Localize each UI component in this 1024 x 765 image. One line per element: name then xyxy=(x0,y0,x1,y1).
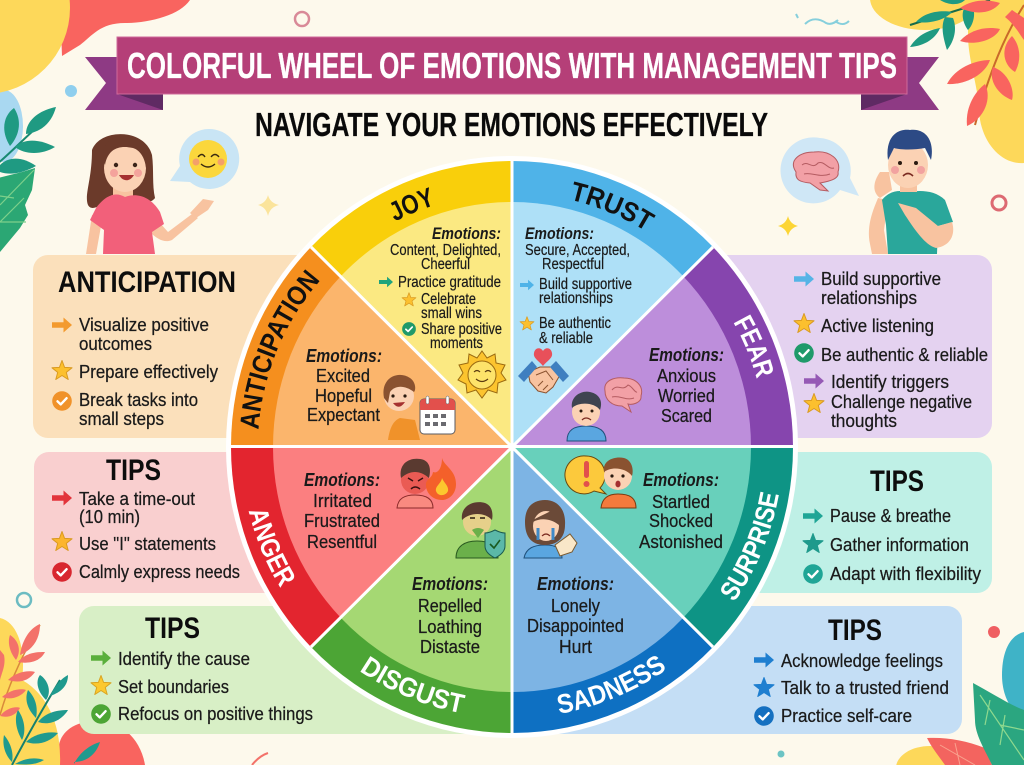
sector: surprise: Astonished xyxy=(639,531,723,552)
panel background xyxy=(34,452,334,593)
heading: TIPS xyxy=(828,614,882,647)
sector: trust: Build supportive xyxy=(539,276,632,293)
sector: sadness: SADNESS xyxy=(558,656,665,713)
tip 1 xyxy=(52,314,209,354)
sector: disgust: Loathing xyxy=(418,616,482,637)
ribbon body xyxy=(117,37,907,94)
sector: fear: Emotions: xyxy=(649,345,724,365)
panel: disgust tips xyxy=(79,606,519,734)
sector: surprise: Emotions: xyxy=(643,470,719,490)
sector: anger: Irritated xyxy=(313,490,372,511)
sector: surprise: Startled xyxy=(652,491,710,512)
sector: sadness: Lonely xyxy=(551,595,601,616)
sector: fear: Anxious xyxy=(657,365,716,386)
emotion wheel xyxy=(226,156,798,738)
character: woman with smiley bubble xyxy=(86,129,239,254)
brain xyxy=(793,152,839,191)
tip 2: Use "I" statements xyxy=(79,533,216,554)
sector: anger: Frustrated xyxy=(304,510,380,531)
tip 3: Adapt with flexibility xyxy=(830,563,982,584)
tip 1: Take a time-out xyxy=(79,488,195,509)
tip 1 xyxy=(52,488,195,527)
panel background xyxy=(520,606,962,734)
tip 2: Gather information xyxy=(830,534,969,555)
icon: sun xyxy=(458,351,506,398)
tip 3: small steps xyxy=(79,408,164,429)
tip 3 xyxy=(52,389,198,429)
tip 3: Calmly express needs xyxy=(79,561,240,582)
sector: fear: FEAR xyxy=(734,314,773,379)
sector: surprise: SURPRISE xyxy=(721,492,779,600)
sector: fear: Scared xyxy=(661,405,712,426)
sector: anticipation: Emotions: xyxy=(306,346,382,366)
decoration: top-right blobs and leaves xyxy=(870,0,1024,163)
decoration: bottom-right blobs and leaves xyxy=(896,632,1024,765)
sector: trust: Emotions: xyxy=(525,225,594,243)
sector: trust: TRUST xyxy=(574,182,656,228)
sector: trust: Be authentic xyxy=(539,315,611,332)
ribbon tails xyxy=(85,57,939,110)
neck xyxy=(113,185,133,201)
sector: anger xyxy=(231,448,509,647)
panel: anger tips xyxy=(34,452,334,593)
smiley face xyxy=(189,140,227,178)
sector: disgust: Distaste xyxy=(420,636,480,657)
sector: sadness: Disappointed xyxy=(527,615,624,636)
sector: sadness xyxy=(514,450,713,733)
tip 3: Refocus on positive things xyxy=(118,703,313,724)
tip 1: Pause & breathe xyxy=(830,505,951,526)
icon: kid with calendar xyxy=(383,375,455,440)
tip 1: outcomes xyxy=(79,333,152,354)
panel background xyxy=(692,452,992,593)
sector: surprise: Shocked xyxy=(649,510,713,531)
speech bubble xyxy=(170,129,239,189)
sector: disgust: Emotions: xyxy=(412,574,488,594)
title ribbon xyxy=(85,37,939,110)
sector: anticipation: Expectant xyxy=(307,404,380,425)
panel: anticipation xyxy=(33,255,333,438)
sector: disgust: DISGUST xyxy=(360,656,466,712)
tip 2: Talk to a trusted friend xyxy=(781,677,949,698)
sector: joy: Cheerful xyxy=(421,256,470,273)
sector: sadness: Emotions: xyxy=(537,574,614,594)
tip 3: Practice self-care xyxy=(781,705,912,726)
tip 1: Visualize positive xyxy=(79,314,209,335)
heading: TIPS xyxy=(106,454,161,487)
sector: fear xyxy=(516,247,793,445)
white wheel rim xyxy=(226,156,798,738)
tip 1: Acknowledge feelings xyxy=(781,650,943,671)
sector: anticipation: ANTICIPATION xyxy=(240,269,320,430)
tip 5: Challenge negative xyxy=(831,391,972,412)
icon: shocked person with alert bubble xyxy=(565,456,636,508)
sector: joy: Share positive xyxy=(421,321,502,338)
icon: worried person and brain xyxy=(567,378,642,441)
sector: joy: small wins xyxy=(421,305,482,322)
face xyxy=(888,142,928,188)
sector: joy: Practice gratitude xyxy=(398,274,501,291)
arms xyxy=(869,198,888,254)
heading: TIPS xyxy=(145,612,200,645)
character: man with brain bubble xyxy=(780,130,953,254)
sector: joy: Emotions: xyxy=(432,225,501,243)
tip 5 xyxy=(804,391,972,431)
tip 1: relationships xyxy=(821,287,917,308)
tip 1: Identify the cause xyxy=(118,648,250,669)
decoration: top-left blobs and leaves xyxy=(0,0,190,252)
heading: ANTICIPATION xyxy=(58,266,236,299)
sector: joy: JOY xyxy=(390,187,430,220)
panel background xyxy=(79,606,519,734)
icon: handshake and heart xyxy=(518,348,569,393)
tip 2: Active listening xyxy=(821,315,934,336)
sector: disgust xyxy=(311,450,510,733)
sector: joy: Celebrate xyxy=(421,291,476,308)
panel: surprise tips xyxy=(692,452,992,593)
tip 4: Identify triggers xyxy=(831,371,949,392)
teal shirt xyxy=(882,191,953,254)
sector: joy: Content, Delighted, xyxy=(390,242,501,259)
tip 2: Set boundaries xyxy=(118,676,229,697)
subtitle: NAVIGATE YOUR EMOTIONS EFFECTIVELY xyxy=(255,106,768,143)
tip 1 xyxy=(794,268,941,308)
pink shirt xyxy=(90,194,164,254)
sector: trust xyxy=(514,161,713,444)
sector: anticipation: Hopeful xyxy=(315,385,372,406)
panel background xyxy=(33,255,333,438)
sector: joy: moments xyxy=(430,335,483,352)
sector: disgust: Repelled xyxy=(418,595,482,616)
decoration: bottom-left blobs and leaves xyxy=(0,618,268,765)
tip 3: Be authentic & reliable xyxy=(821,344,988,365)
speech bubble xyxy=(780,137,859,203)
sector: trust: Secure, Accepted, xyxy=(525,242,630,259)
sector: sadness: Hurt xyxy=(559,636,592,657)
sector: joy xyxy=(311,161,510,444)
panel: sadness tips xyxy=(520,606,962,734)
tip 2: Prepare effectively xyxy=(79,361,219,382)
hair back xyxy=(87,134,155,208)
tip 1: (10 min) xyxy=(79,506,140,527)
sector: anger: Resentful xyxy=(307,531,377,552)
icon: sick person with shield xyxy=(456,502,505,558)
sector: anticipation: Excited xyxy=(316,365,370,386)
sector: trust: & reliable xyxy=(539,330,593,347)
sector: trust: relationships xyxy=(539,290,613,307)
panel: fear tips xyxy=(692,255,992,438)
tip 1: Build supportive xyxy=(821,268,941,289)
arms xyxy=(86,214,198,254)
face xyxy=(104,144,146,192)
icon: crying woman with tissue xyxy=(524,500,577,558)
tip 5: thoughts xyxy=(831,410,897,431)
panel background xyxy=(692,255,992,438)
sector: anticipation xyxy=(231,247,508,445)
neck xyxy=(900,178,917,192)
tip 3: Break tasks into xyxy=(79,389,198,410)
sector: fear: Worried xyxy=(658,385,715,406)
sector: anger: Emotions: xyxy=(304,470,380,490)
sector: anger: ANGER xyxy=(248,511,294,588)
heading: TIPS xyxy=(870,465,924,498)
icon: angry person with fire xyxy=(397,458,456,508)
sector: trust: Respectful xyxy=(542,256,604,273)
sector: surprise xyxy=(515,448,793,647)
wheel dividers xyxy=(231,161,793,733)
